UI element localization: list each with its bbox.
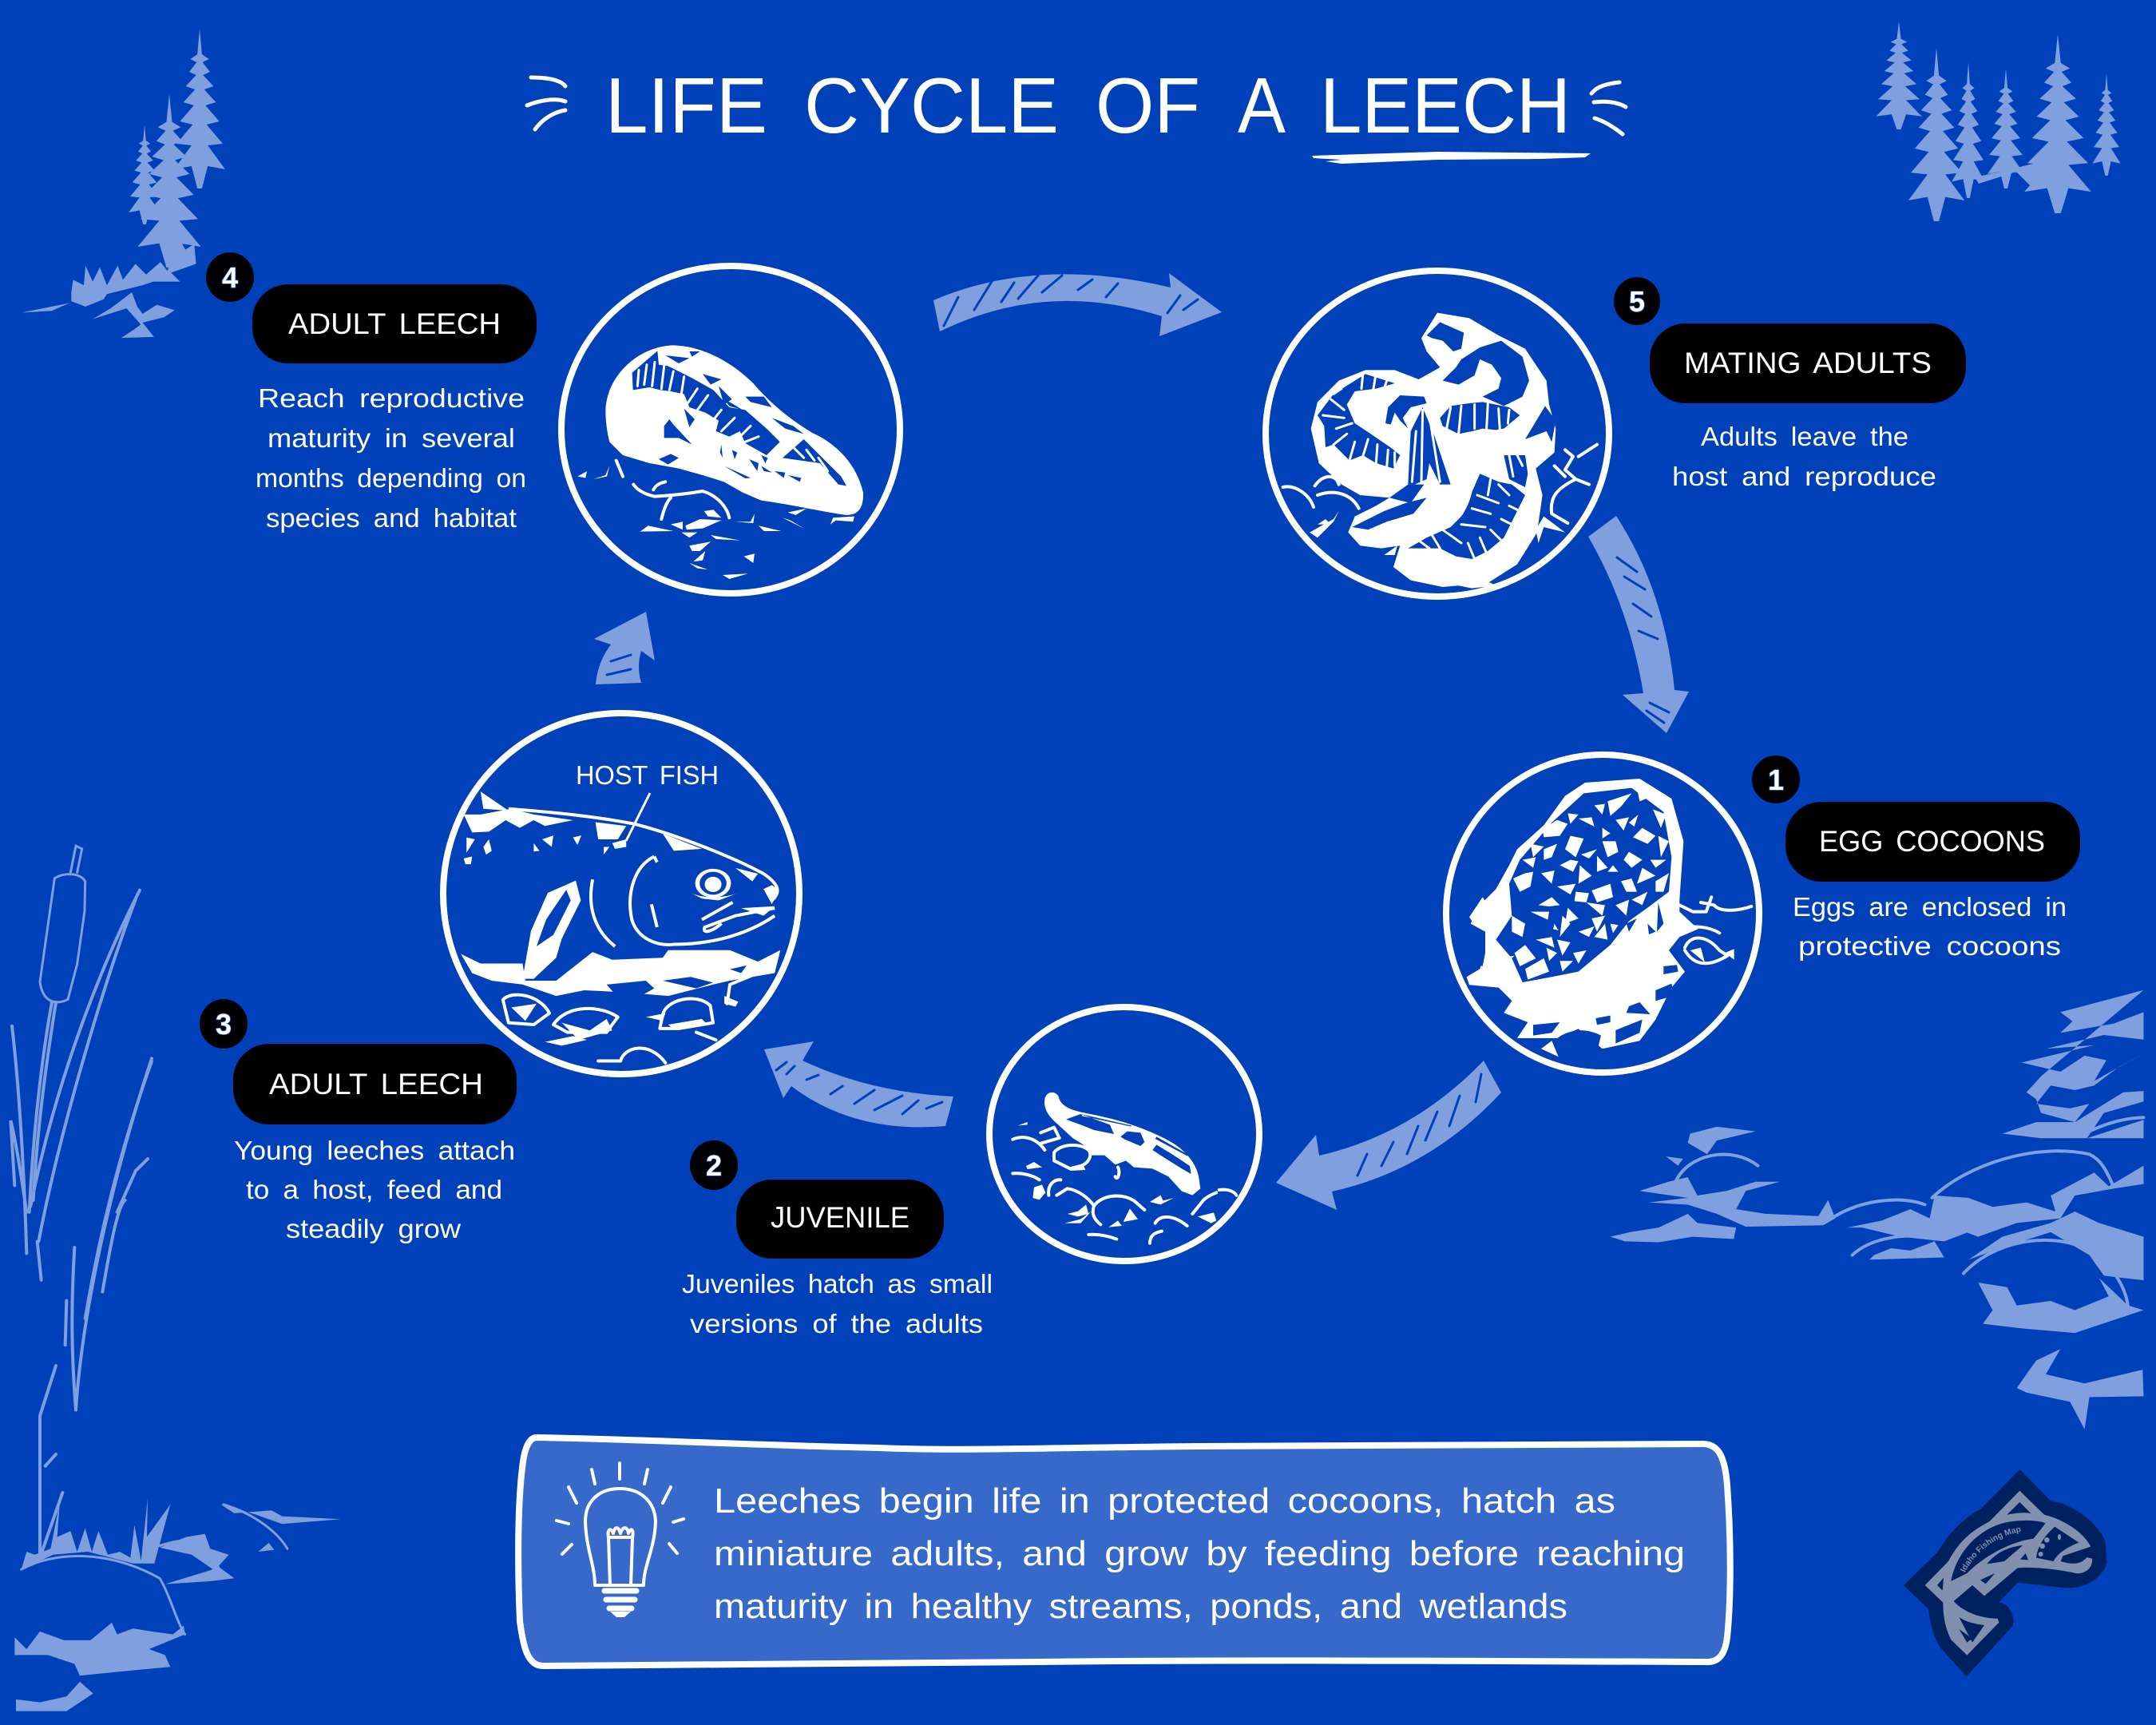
panel: adult leech illustration [561, 266, 900, 593]
step 3 badge [200, 999, 248, 1049]
step 1 text: Eggs are enclosed in [1793, 892, 2067, 922]
step 4 text: months depending on [256, 463, 526, 493]
step 4 pill: ADULT LEECH [288, 307, 501, 340]
step 4 text: species and habitat [266, 503, 517, 533]
step 2 badge: 2 [706, 1149, 722, 1182]
callout box [518, 1438, 1730, 1666]
step 2 pill: JUVENILE [771, 1201, 910, 1234]
decoration: right trees [1876, 22, 2121, 221]
title [605, 61, 1571, 149]
step 4 text [256, 383, 526, 533]
step 1 text: protective cocoons [1798, 931, 2061, 961]
title sparks left [527, 77, 565, 129]
step 3 text: steadily grow [286, 1214, 461, 1243]
step 4 pill [252, 284, 537, 363]
step 2 text: versions of the adults [690, 1309, 983, 1338]
step 2 text: Juveniles hatch as small [682, 1269, 993, 1299]
title: OF [1096, 61, 1200, 149]
arrow: host fish to adult [594, 612, 655, 684]
title: A [1238, 61, 1286, 149]
decoration: left cattails and rocks [10, 846, 341, 1711]
logo: Idaho Fishing Map fish: Idaho Fishing Map [1960, 1527, 2020, 1572]
callout text: miniature adults, and grow by feeding before reaching [714, 1534, 1685, 1573]
step 3 text [234, 1136, 515, 1243]
step 5 badge [1614, 277, 1660, 325]
panel: host fish illustration [443, 713, 799, 1074]
step 1 pill: EGG COCOONS [1819, 825, 2045, 858]
step 5 pill: MATING ADULTS [1684, 347, 1932, 379]
step 2 pill [736, 1180, 944, 1259]
callout text [714, 1481, 1685, 1626]
title: CYCLE [804, 61, 1059, 149]
step 1 badge [1752, 755, 1800, 803]
step 3 pill [233, 1044, 517, 1124]
step 2 text [682, 1269, 993, 1338]
panel: egg cocoons illustration [1446, 755, 1759, 1073]
callout text: Leeches begin life in protected cocoons, hatch as [714, 1481, 1615, 1521]
icon: egg cocoon [1467, 779, 1751, 1060]
label: host fish: HOST FISH [576, 760, 719, 790]
step 4 text: maturity in several [268, 423, 515, 453]
title underline [1312, 152, 1591, 164]
step 4 text: Reach reproductive [258, 383, 525, 413]
arrow: mating to eggs [1588, 516, 1689, 733]
decoration: left trees and shore [22, 29, 225, 338]
step 5 text [1672, 422, 1936, 491]
title: LEECH [1320, 61, 1571, 149]
arrow: eggs to juvenile [1276, 1061, 1501, 1210]
step 5 text: host and reproduce [1672, 462, 1936, 491]
step 1 pill [1785, 802, 2080, 882]
step 3 text: Young leeches attach [234, 1136, 515, 1165]
icon: host fish [461, 791, 780, 1063]
icon: adult leech [577, 345, 863, 579]
step 5 text: Adults leave the [1701, 422, 1908, 451]
icon: mating leeches [1283, 313, 1597, 589]
step 5 pill [1650, 323, 1966, 403]
arrow: adult to mating [933, 273, 1222, 336]
step 3 text: to a host, feed and [246, 1175, 502, 1204]
step 5 badge: 5 [1629, 285, 1645, 318]
panel: juvenile illustration [989, 1007, 1259, 1261]
leader line [626, 793, 650, 841]
step 2 badge [690, 1140, 738, 1190]
icon: light bulb [557, 1463, 684, 1617]
callout text: maturity in healthy streams, ponds, and wetlands [714, 1587, 1567, 1626]
step 1 text [1793, 892, 2067, 961]
step 3 pill: ADULT LEECH [269, 1068, 483, 1100]
arrow: juvenile to host fish [764, 1041, 953, 1127]
logo: Idaho Fishing Map fish [1904, 1469, 2106, 1677]
panel: mating adults illustration [1266, 271, 1609, 597]
step 1 badge: 1 [1768, 763, 1784, 796]
title: LIFE [605, 61, 767, 149]
step 3 badge: 3 [216, 1008, 232, 1041]
icon: juvenile leech [1013, 1092, 1236, 1243]
step 4 badge: 4 [222, 261, 238, 294]
step 4 badge [206, 252, 254, 302]
title sparks right [1591, 82, 1626, 134]
decoration: right rocks [1611, 990, 2143, 1430]
